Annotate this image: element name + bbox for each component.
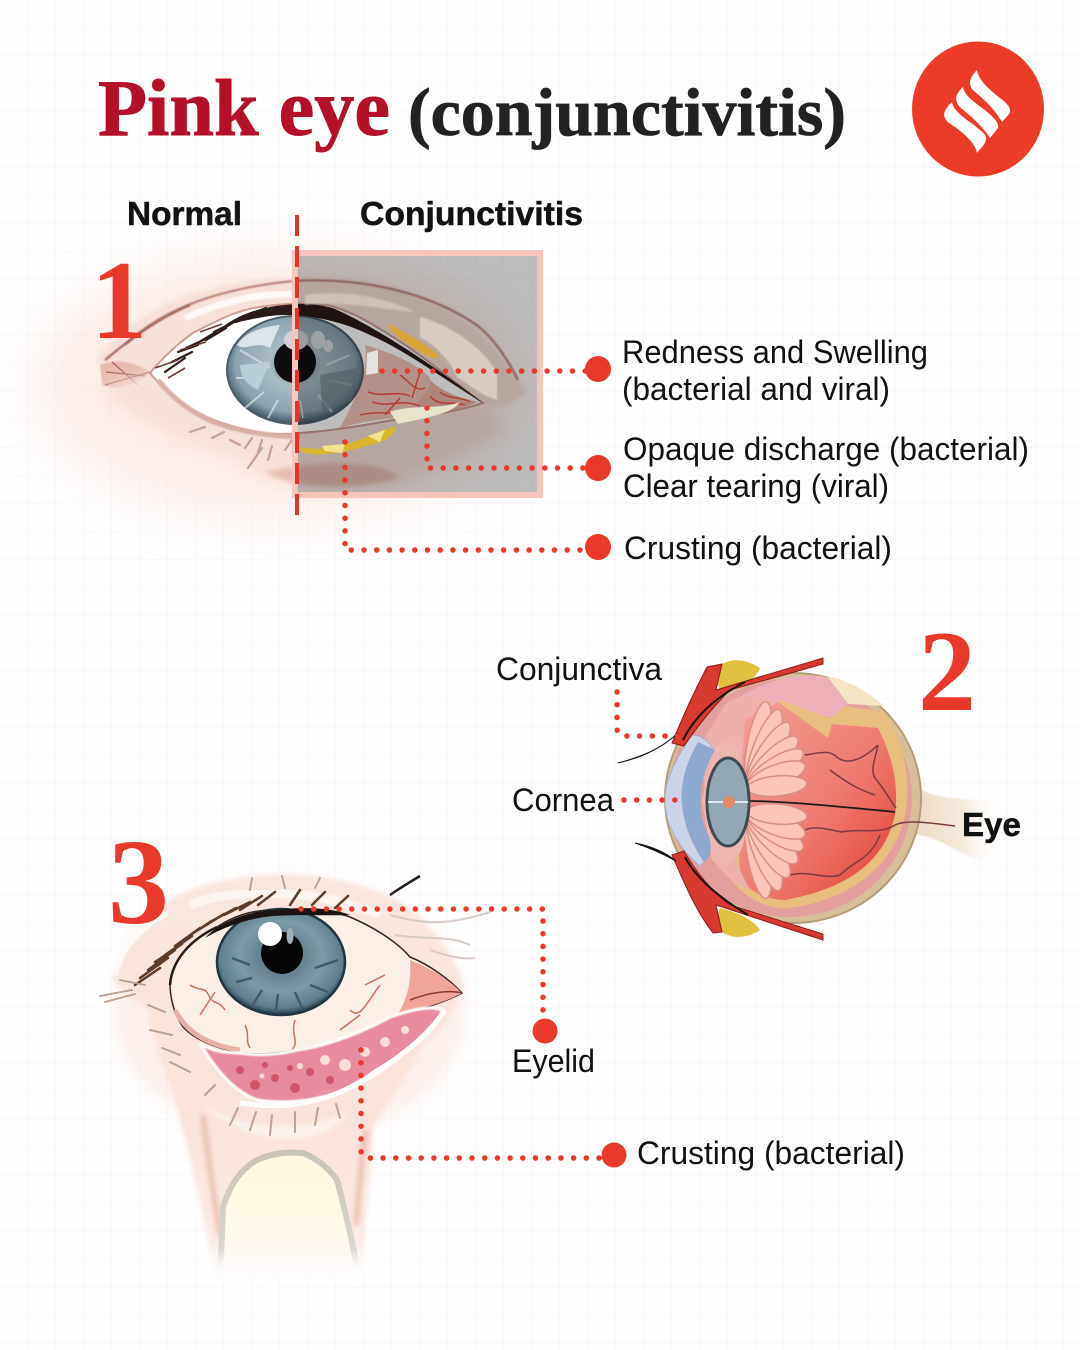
title: (conjunctivitis) [408, 74, 846, 150]
callout: cornea: Cornea [512, 782, 614, 818]
finger [220, 1153, 357, 1273]
upper eyelid fold [97, 277, 527, 407]
veins [360, 372, 470, 415]
callout: eyelid: Eyelid [512, 1043, 595, 1079]
callout: eyelid [301, 909, 595, 1079]
clear discharge [390, 402, 460, 424]
callout: discharge and tearing [427, 408, 1029, 504]
caruncle [395, 960, 462, 1018]
eye white [170, 909, 462, 1054]
iris [217, 909, 345, 1015]
title [98, 65, 846, 153]
left corner tissue [100, 361, 150, 388]
optic nerve [905, 778, 1000, 863]
lower lashes [190, 427, 292, 468]
callout: redness and swelling [382, 334, 928, 407]
veins [190, 975, 385, 1050]
callout: crusting, lower lid [361, 1050, 905, 1171]
eyelashes [618, 733, 678, 763]
divider: dashed line [295, 215, 299, 524]
cornea [665, 735, 712, 866]
eye muscles [672, 658, 823, 746]
icon: publisher logo [912, 42, 1044, 176]
eyeball and sclera [150, 304, 483, 434]
callout: crusting: Crusting (bacterial) [624, 530, 892, 566]
choroid band [725, 700, 907, 908]
iris tissue [702, 742, 745, 864]
sclera [668, 679, 912, 917]
outer globe [665, 673, 921, 923]
upper lashes [135, 890, 348, 985]
lower lashes [148, 1005, 340, 1135]
upper lash line [225, 304, 483, 403]
crust deposits [387, 323, 440, 358]
pupil [274, 341, 316, 383]
pupil [261, 932, 303, 974]
label: Eye: Eye [962, 806, 1021, 843]
skin glow [115, 880, 465, 1140]
fat tissue [714, 660, 760, 690]
number 1: 1 [91, 239, 147, 363]
label: Conjunctivitis: Conjunctivitis [360, 195, 583, 232]
number 3: 3 [108, 815, 169, 950]
callout: crusting, lower lid: Crusting (bacterial) [637, 1135, 905, 1171]
lens [707, 758, 749, 846]
callout: conjunctiva [496, 651, 690, 736]
everted lower lid [200, 1008, 443, 1102]
callout: redness and swelling: (bacterial and viral) [622, 371, 890, 407]
number 2: 2 [918, 608, 976, 736]
upper lid line [205, 908, 350, 938]
skin [110, 875, 463, 1290]
conjunctivitis overlay panel [295, 253, 540, 495]
callout: conjunctiva: Conjunctiva [496, 651, 662, 687]
swollen lid highlights [420, 317, 497, 400]
brow fold [190, 893, 380, 915]
ciliary fan [739, 700, 809, 900]
blood vessels [790, 745, 955, 876]
title: Pink eye [98, 65, 390, 153]
lower skin [100, 373, 507, 488]
callout: redness and swelling: Redness and Swelling [622, 334, 928, 370]
label: Normal: Normal [127, 195, 242, 232]
illustration: eye anatomy cross-section [618, 658, 1000, 940]
callout: crusting [345, 442, 892, 566]
illustration: pink eye with everted lower lid [100, 875, 490, 1290]
retina chamber [735, 702, 896, 900]
skin glow [40, 255, 520, 515]
callout: discharge and tearing: Clear tearing (viral) [623, 468, 889, 504]
illustration: eye comparison, normal and conjunctivitis [40, 253, 540, 515]
iris [227, 316, 363, 424]
callout: discharge and tearing: Opaque discharge (bacterial) [623, 431, 1029, 467]
